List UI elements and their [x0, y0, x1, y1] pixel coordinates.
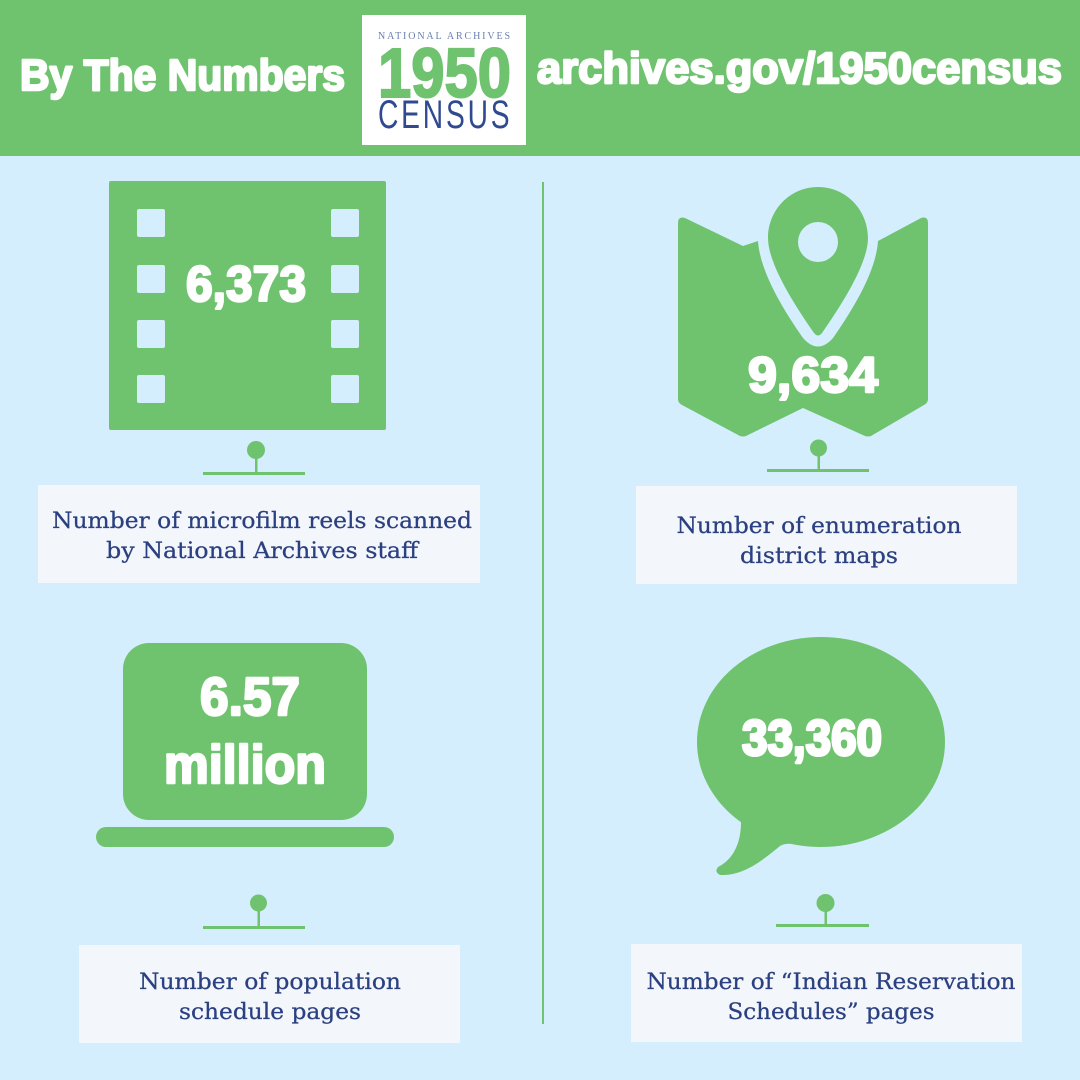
- logo: National Archives 1950 Census: [362, 15, 526, 145]
- panel: enumeration district maps: [636, 187, 1017, 584]
- caption box: by National Archives staff: [106, 539, 419, 564]
- icon: map with location pin: [678, 187, 928, 436]
- number: 9,634: 9,634: [748, 347, 878, 403]
- icon: film strip: [109, 181, 386, 430]
- icon: laptop: [96, 643, 394, 847]
- connector pin: [203, 894, 305, 929]
- panel: population schedule pages: [79, 643, 460, 1043]
- caption box: district maps: [740, 544, 898, 569]
- number: 6.57 million: million: [164, 735, 326, 795]
- caption box: [38, 485, 480, 583]
- caption box: Number of “Indian Reservation: [646, 970, 1016, 995]
- caption box: Number of enumeration: [676, 514, 962, 539]
- panel: microfilm reels: [38, 181, 480, 583]
- caption box: [631, 944, 1022, 1042]
- number: 6.57 million: [164, 667, 326, 795]
- panel: Indian Reservation Schedules: [631, 637, 1022, 1042]
- caption box: Schedules” pages: [728, 1000, 934, 1025]
- connector pin: [776, 894, 869, 927]
- website address: archives.gov/1950census: [537, 44, 1062, 93]
- caption box: [79, 945, 460, 1043]
- connector pin: [767, 440, 869, 472]
- caption box: schedule pages: [179, 1000, 361, 1025]
- number: 33,360: 33,360: [742, 710, 882, 766]
- title: By The Numbers: By The Numbers: [20, 51, 345, 100]
- caption box: Number of population: [139, 970, 401, 995]
- number: 6.57 million: 6.57: [200, 667, 300, 727]
- logo: National Archives 1950 Census: 1950: [378, 34, 511, 112]
- header banner: [0, 0, 1080, 156]
- center divider: [542, 182, 544, 1024]
- caption box: [636, 486, 1017, 584]
- caption box: Number of microfilm reels scanned: [52, 509, 472, 534]
- connector pin: [203, 441, 305, 475]
- icon: speech bubble: [697, 637, 945, 875]
- number: 6,373: 6,373: [186, 256, 306, 312]
- logo: National Archives 1950 Census: NATIONAL ARCHIVES: [378, 31, 510, 42]
- logo: National Archives 1950 Census: CENSUS: [378, 93, 512, 137]
